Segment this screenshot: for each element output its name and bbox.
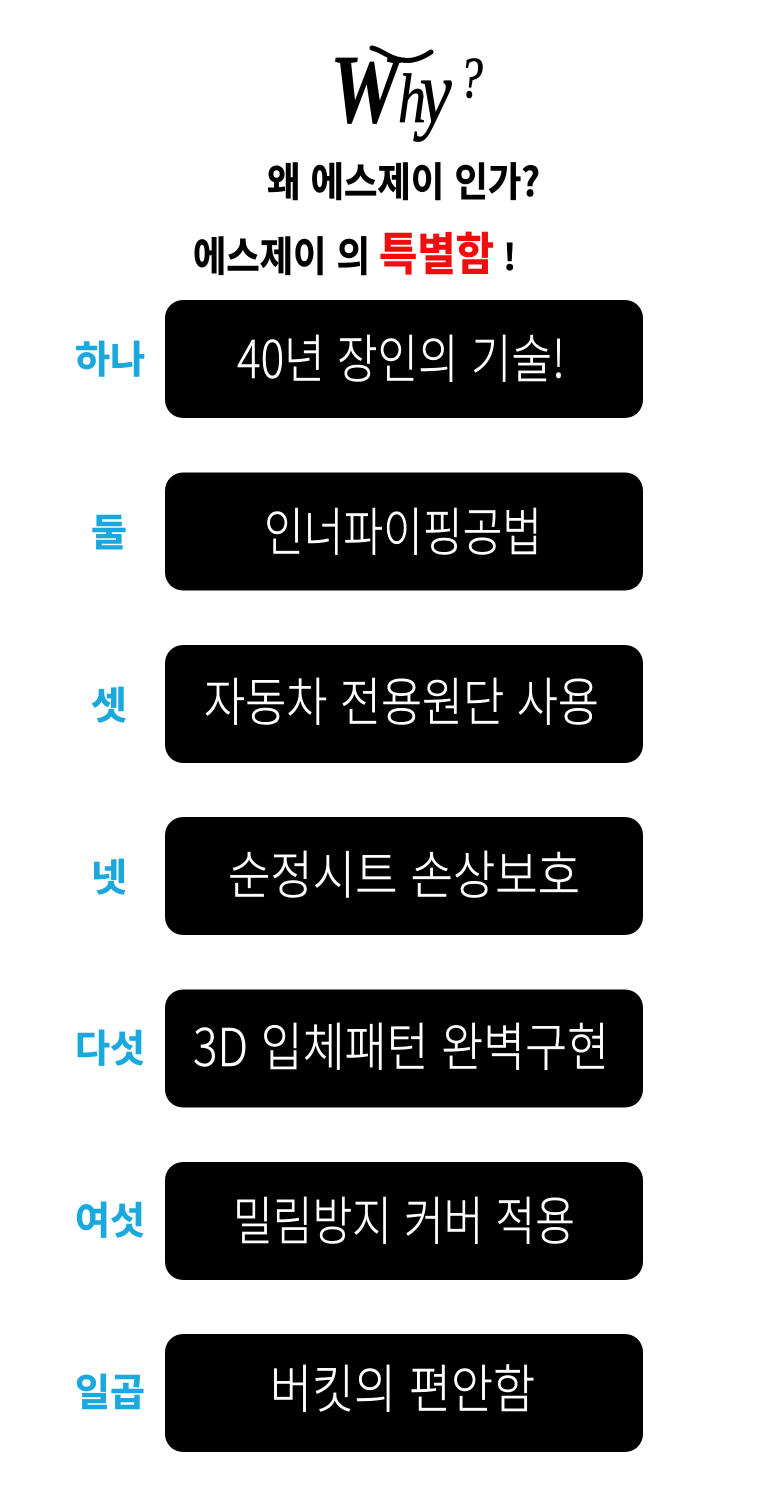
label: six: 여섯	[75, 1190, 145, 1245]
panel: anti-slip cover	[165, 1162, 643, 1280]
panel: automotive fabric	[165, 645, 643, 763]
panel text: 3D pattern: 3D 입체패턴 완벽구현	[193, 1006, 609, 1081]
panel text: automotive fabric: 자동차 전용원단 사용	[204, 661, 599, 736]
panel text: 40 years of craft: 40년 장인의 기술!	[237, 318, 565, 393]
script title: Why?: y	[413, 41, 452, 142]
label: two: 둘	[91, 502, 127, 557]
panel text: bucket seat comfort: 버킷의 편안함	[270, 1348, 535, 1423]
row 7	[75, 1334, 643, 1452]
label: five: 다섯	[75, 1018, 145, 1073]
label: one: 하나	[75, 329, 145, 384]
label: four: 넷	[91, 847, 127, 902]
panel: protects original seat	[165, 817, 643, 935]
heading: what makes SJ special: 특별함	[379, 218, 494, 283]
heading: what makes SJ special: !	[503, 229, 516, 281]
panel text: protects original seat: 순정시트 손상보호	[228, 834, 580, 909]
panel text: anti-slip cover: 밀림방지 커버 적용	[233, 1180, 575, 1255]
script title: Why?: ?	[460, 46, 483, 110]
panel: inner piping method	[165, 472, 643, 590]
script title: Why?: h	[398, 60, 426, 137]
script title: Why?	[330, 36, 483, 144]
panel: bucket seat comfort	[165, 1334, 643, 1452]
row 4	[91, 817, 643, 935]
panel: 3D pattern	[165, 990, 643, 1108]
row 6	[75, 1162, 643, 1280]
panel text: inner piping method: 인너파이핑공법	[264, 491, 542, 566]
heading: what makes SJ special: 에스제이 의	[193, 223, 370, 283]
row 3	[91, 645, 643, 763]
panel: 40 years of craft	[165, 300, 643, 418]
script title: Why?: W	[330, 36, 405, 144]
heading: what makes SJ special	[193, 218, 516, 283]
row 2	[91, 472, 643, 590]
heading: why SJ: 왜 에스제이 인가?	[267, 150, 540, 208]
label: three: 셋	[91, 675, 127, 730]
label: seven: 일곱	[75, 1362, 145, 1417]
row 1	[75, 300, 643, 418]
row 5	[75, 990, 643, 1108]
